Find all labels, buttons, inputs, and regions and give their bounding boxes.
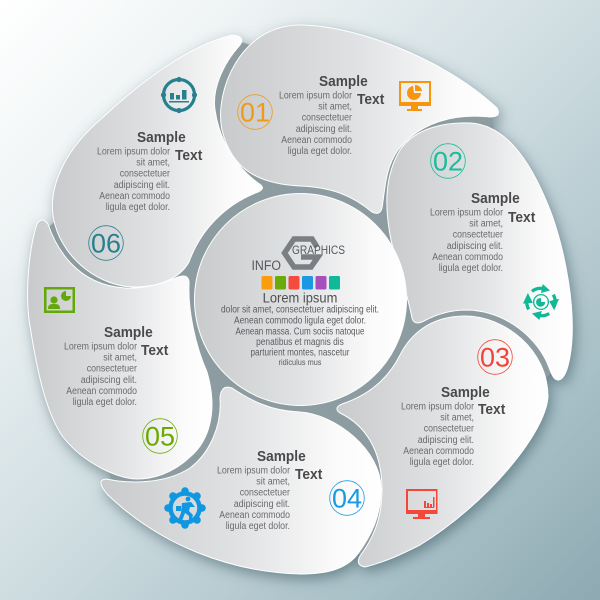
centre heading: Lorem ipsum — [263, 290, 337, 306]
panel: 05 — [28, 220, 212, 479]
text 03: Sample — [441, 385, 490, 401]
number 05: 05 — [145, 422, 175, 452]
panel: 02 — [387, 123, 572, 380]
text 03: ligula eget dolor. — [410, 457, 474, 468]
icon: chart in ring — [161, 77, 197, 113]
text 01 — [279, 74, 384, 157]
text 02: consectetuer — [453, 230, 504, 240]
text 04 — [217, 449, 322, 532]
panel: centre — [194, 194, 406, 406]
text 03: Aenean commodo — [403, 446, 474, 457]
text 06: consectetuer — [120, 168, 171, 180]
text 01: consectetuer — [302, 112, 353, 124]
text 06: Text — [175, 148, 202, 164]
text 06: Lorem ipsum dolor — [97, 146, 171, 158]
logo: GRAPHICS — [292, 243, 345, 257]
text 04: consectetuer — [240, 488, 291, 498]
text 01: Lorem ipsum dolor — [279, 90, 353, 102]
icon: presenter board — [44, 287, 75, 313]
centre text: Aenean commodo ligula eget dolor. — [234, 316, 366, 326]
logo: INFO — [252, 258, 281, 273]
text 02: Text — [508, 210, 535, 226]
text 04: Lorem ipsum dolor — [217, 466, 291, 476]
text 05: ligula eget dolor. — [73, 397, 137, 408]
text 05: Text — [141, 343, 168, 359]
number 02: 02 — [433, 146, 463, 176]
colour swatches — [262, 276, 340, 290]
text 01: Aenean commodo — [281, 135, 352, 146]
text 06: adipiscing elit. — [114, 180, 170, 191]
text 04: Sample — [257, 449, 306, 465]
text 03: consectetuer — [424, 424, 475, 434]
text 04: Text — [295, 467, 322, 483]
icon: gear with runner — [164, 487, 206, 529]
number 04: 04 — [332, 484, 362, 514]
text 05: adipiscing elit. — [81, 375, 137, 386]
text 02: Aenean commodo — [432, 252, 503, 263]
text 05 — [64, 325, 168, 408]
text 01: Text — [357, 92, 384, 108]
number 03: 03 — [480, 342, 510, 372]
text 01: adipiscing elit. — [296, 124, 352, 135]
text 04: sit amet, — [256, 476, 290, 488]
text 02: sit amet, — [469, 218, 503, 230]
centre text: Aenean massa. Cum sociis natoque — [236, 326, 365, 338]
text 02: Sample — [471, 191, 520, 207]
centre text — [221, 304, 379, 367]
text 03: sit amet, — [440, 412, 474, 424]
text 03: adipiscing elit. — [418, 435, 474, 446]
text 04: ligula eget dolor. — [226, 521, 290, 532]
text 05: Aenean commodo — [66, 386, 137, 397]
text 04: Aenean commodo — [219, 510, 290, 521]
text 04: adipiscing elit. — [234, 499, 290, 510]
text 02: adipiscing elit. — [447, 241, 503, 252]
text 05: consectetuer — [87, 364, 138, 374]
text 06: Aenean commodo — [99, 191, 170, 202]
logo — [252, 239, 345, 273]
icon: monitor with bars — [406, 489, 438, 519]
text 05: Sample — [104, 325, 153, 341]
text 03: Lorem ipsum dolor — [401, 402, 475, 412]
panel: 04 — [101, 387, 381, 574]
panel: 01 — [221, 25, 498, 213]
centre text: penatibus et magnis dis — [256, 337, 344, 348]
text 03 — [401, 385, 505, 468]
text 02 — [430, 191, 535, 274]
centre text: dolor sit amet, consectetuer adipiscing elit. — [221, 304, 379, 316]
text 01: ligula eget dolor. — [288, 146, 352, 157]
text 01: Sample — [319, 74, 368, 90]
panel: 03 — [337, 316, 548, 567]
text 03: Text — [478, 402, 505, 418]
text 05: sit amet, — [103, 352, 137, 364]
number 01: 01 — [240, 98, 270, 128]
text 01: sit amet, — [318, 102, 352, 112]
icon: monitor with pie — [399, 81, 431, 111]
text 06: sit amet, — [136, 158, 170, 168]
text 05: Lorem ipsum dolor — [64, 342, 138, 352]
panel: 06 — [52, 35, 263, 287]
text 06: ligula eget dolor. — [106, 202, 170, 213]
number 06: 06 — [91, 228, 121, 258]
text 06 — [97, 130, 202, 213]
text 02: ligula eget dolor. — [439, 263, 503, 274]
centre text: parturient montes, nascetur — [250, 348, 350, 358]
text 02: Lorem ipsum dolor — [430, 208, 504, 218]
centre text: ridiculus mus — [278, 357, 322, 367]
icon: rotating arrows — [523, 284, 559, 320]
text 06: Sample — [137, 130, 186, 146]
